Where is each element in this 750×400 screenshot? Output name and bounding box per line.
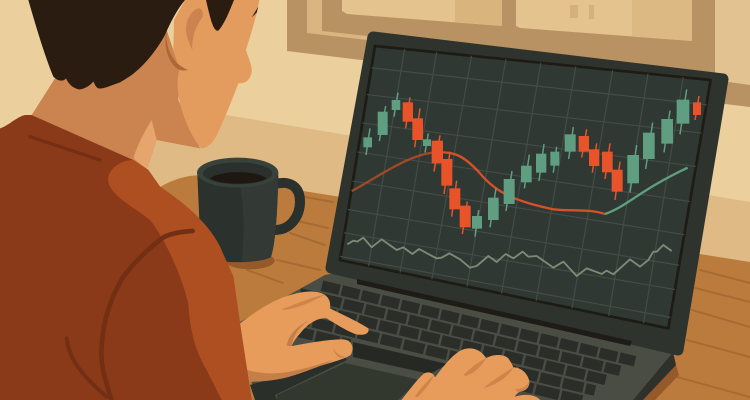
mug shadow	[225, 252, 275, 269]
hinge shadow	[357, 279, 632, 346]
mug lit side	[240, 177, 278, 261]
hand left underside	[242, 360, 333, 382]
screen	[338, 46, 711, 328]
mug	[197, 158, 300, 269]
sleeve fold	[67, 338, 107, 397]
hair back	[28, 0, 185, 89]
mug handle	[275, 183, 300, 230]
deck	[240, 272, 673, 400]
neck	[32, 30, 200, 170]
screen panel	[340, 46, 711, 328]
lid shell	[331, 37, 723, 350]
inner ear	[186, 8, 203, 50]
table	[160, 175, 750, 400]
deck front side	[633, 352, 676, 400]
dark strip left of trackpad	[250, 357, 347, 400]
shirt shoulder highlight	[108, 160, 252, 400]
keys	[290, 286, 635, 400]
laptop base	[240, 272, 676, 400]
candlesticks green	[363, 89, 689, 237]
shirt seam	[30, 137, 100, 160]
hand left shape	[240, 292, 369, 382]
mug inner	[203, 162, 272, 184]
neck highlight	[133, 120, 157, 169]
moving average line red right	[433, 152, 605, 214]
lower finger	[513, 395, 542, 400]
thumb shading	[287, 321, 308, 346]
ear	[165, 30, 188, 71]
trackpad	[277, 363, 420, 400]
table shadow under laptop	[640, 362, 679, 400]
person	[0, 0, 259, 400]
hand left	[240, 292, 369, 382]
space bar	[353, 342, 447, 374]
coffee	[210, 172, 267, 184]
hand right shape	[400, 348, 529, 400]
chart grid	[338, 47, 708, 327]
laptop lid	[331, 37, 723, 350]
mug body	[197, 173, 278, 262]
hair front	[206, 0, 234, 31]
window	[287, 0, 750, 107]
shirt	[0, 115, 252, 400]
hand right	[400, 348, 542, 400]
moving average line red left	[352, 153, 433, 191]
candlesticks red	[403, 96, 701, 234]
knuckle creases	[415, 375, 434, 397]
finger crease	[282, 294, 325, 310]
eyelash	[252, 7, 258, 17]
lower wall band	[100, 94, 750, 400]
face	[173, 0, 259, 149]
moving average line green	[605, 168, 688, 214]
sleeve seam	[101, 231, 193, 400]
indicator line	[347, 238, 672, 276]
mug rim	[197, 158, 278, 188]
